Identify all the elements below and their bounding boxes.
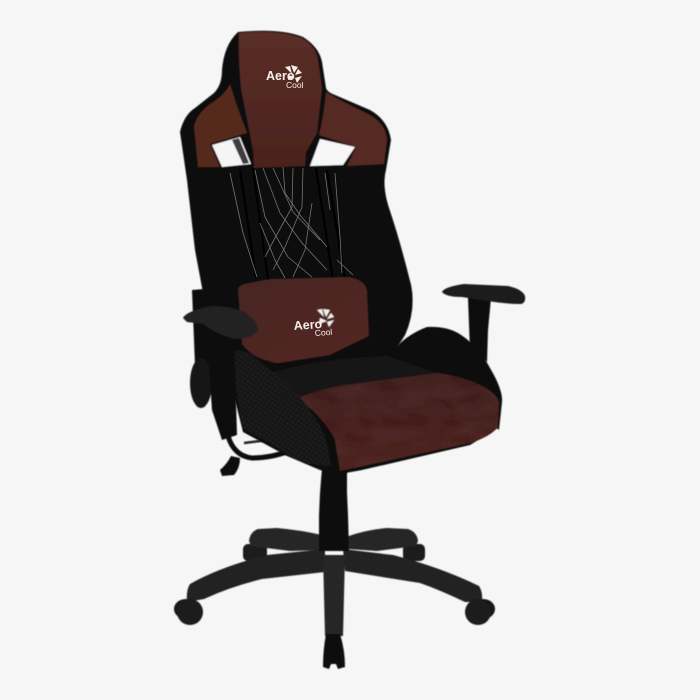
headrest logo: Aero bbox=[266, 69, 295, 83]
lumbar logo fan bbox=[317, 309, 334, 327]
right wing brown bbox=[319, 92, 387, 166]
left headrest window bbox=[212, 137, 251, 167]
back left leg bbox=[249, 528, 322, 551]
front caster bbox=[323, 634, 345, 669]
tilt loop bbox=[228, 436, 292, 458]
infographic: gaming chair product photo bbox=[173, 30, 526, 670]
back right caster bbox=[403, 544, 425, 561]
lumbar logo text: Aero bbox=[293, 317, 323, 333]
back fabric panel bbox=[228, 168, 333, 290]
back outer shell bbox=[180, 31, 413, 380]
right headrest window bbox=[310, 139, 355, 166]
gas column bbox=[319, 468, 349, 551]
left front leg bbox=[187, 549, 325, 602]
left front caster bbox=[174, 599, 203, 625]
seat velvet texture bbox=[302, 372, 500, 472]
recline plate bbox=[192, 289, 212, 392]
arm pad bbox=[442, 284, 525, 304]
back right leg bbox=[346, 528, 418, 551]
seat black centre bbox=[273, 356, 437, 398]
arm pad bbox=[183, 306, 258, 339]
left wing brown bbox=[194, 84, 247, 167]
seat black underlay bbox=[228, 350, 500, 474]
arm post bbox=[206, 322, 237, 440]
lever knob bbox=[220, 456, 240, 476]
logo fan bbox=[285, 65, 302, 83]
left armrest bbox=[183, 289, 258, 440]
chair base bbox=[174, 468, 495, 669]
headrest logo bbox=[266, 65, 304, 90]
lumbar pillow bbox=[238, 277, 369, 364]
seat brown panel bbox=[298, 373, 499, 471]
headrest brown bbox=[239, 32, 322, 168]
right side panel bbox=[345, 168, 413, 345]
stitching bbox=[230, 167, 353, 278]
right front leg bbox=[343, 549, 482, 602]
lever bar bbox=[244, 440, 268, 443]
front leg bbox=[323, 555, 345, 636]
right front caster bbox=[465, 599, 495, 625]
seat cushion bbox=[228, 327, 505, 475]
recline knob bbox=[190, 358, 212, 408]
back left caster bbox=[243, 544, 267, 561]
lumbar logo text: Cool bbox=[314, 327, 333, 338]
right armrest bbox=[442, 284, 525, 362]
right bolster bbox=[385, 327, 502, 430]
left side panel bbox=[187, 168, 250, 298]
mechanism bbox=[220, 436, 292, 476]
lumbar logo text bbox=[293, 317, 333, 338]
left mesh bolster bbox=[233, 350, 331, 466]
arm post bbox=[468, 298, 491, 362]
seams bbox=[240, 168, 345, 280]
headrest logo: Cool bbox=[286, 80, 304, 90]
seat back bbox=[180, 31, 413, 380]
